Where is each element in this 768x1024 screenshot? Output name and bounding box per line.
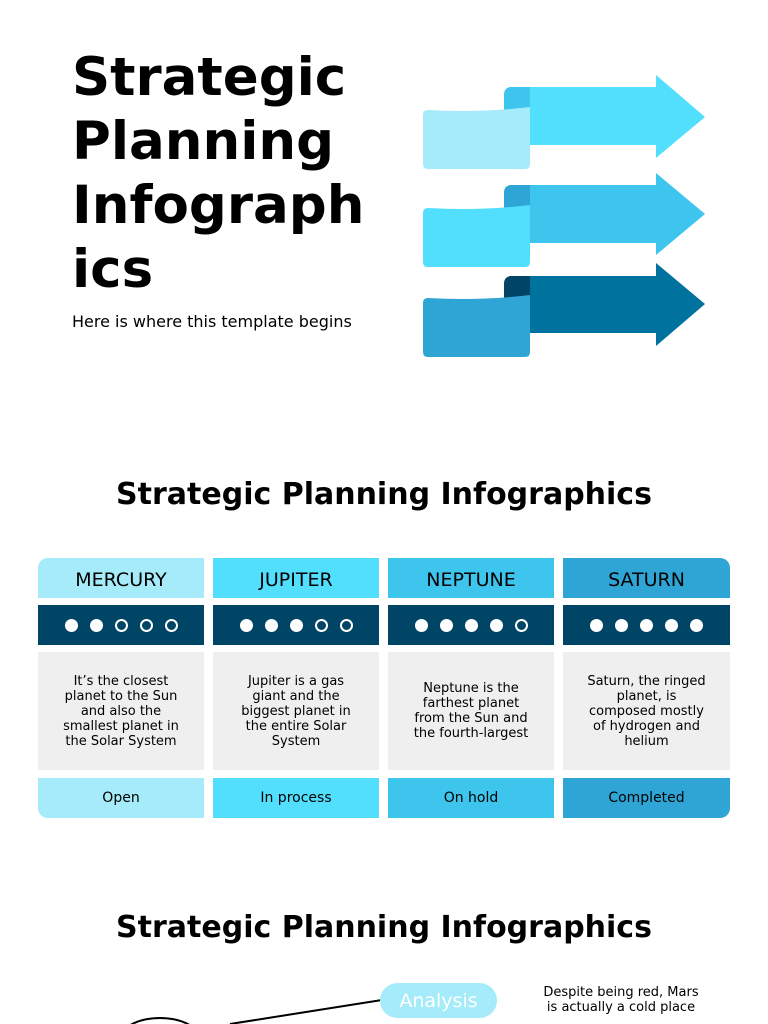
column: mercury [38, 558, 204, 818]
column: jupiter: JUPITER [259, 568, 333, 590]
column: saturn: Saturn, the ringed planet, is composed mostly of hydrogen and helium [587, 674, 706, 748]
heading 2: Strategic Planning Infographics [116, 477, 652, 512]
arrow 1 [423, 75, 705, 169]
heading 3: Strategic Planning Infographics [116, 910, 652, 945]
column: jupiter: In process [260, 790, 332, 806]
arrow 2 [423, 173, 705, 267]
illustration: ribbon arrows [423, 75, 705, 357]
column: jupiter: Jupiter is a gas giant and the biggest planet in the entire Solar System [241, 674, 351, 748]
column: neptune: NEPTUNE [426, 568, 516, 590]
column: mercury: Open [102, 790, 140, 806]
pill: analysis [380, 983, 497, 1018]
column: mercury: MERCURY [75, 568, 167, 590]
title: Strategic Planning Infograph ics [72, 47, 364, 300]
column: saturn [563, 558, 730, 818]
arrow 3 [423, 263, 705, 357]
subtitle: Here is where this template begins [72, 312, 352, 331]
column: neptune: Neptune is the farthest planet from the Sun and the fourth-largest [414, 681, 528, 741]
column: saturn: SATURN [608, 568, 685, 590]
column: neptune: On hold [444, 790, 498, 806]
column: saturn: Completed [608, 790, 685, 806]
column: jupiter [213, 558, 379, 818]
pill: analysis: Analysis [399, 990, 478, 1012]
column: mercury: It’s the closest planet to the Sun and also the smallest planet in the Solar System [63, 674, 179, 748]
table [38, 558, 730, 818]
text: analysis: Despite being red, Mars is actually a cold place [543, 985, 699, 1015]
diagram connectors [130, 999, 380, 1024]
column: neptune [388, 558, 554, 818]
